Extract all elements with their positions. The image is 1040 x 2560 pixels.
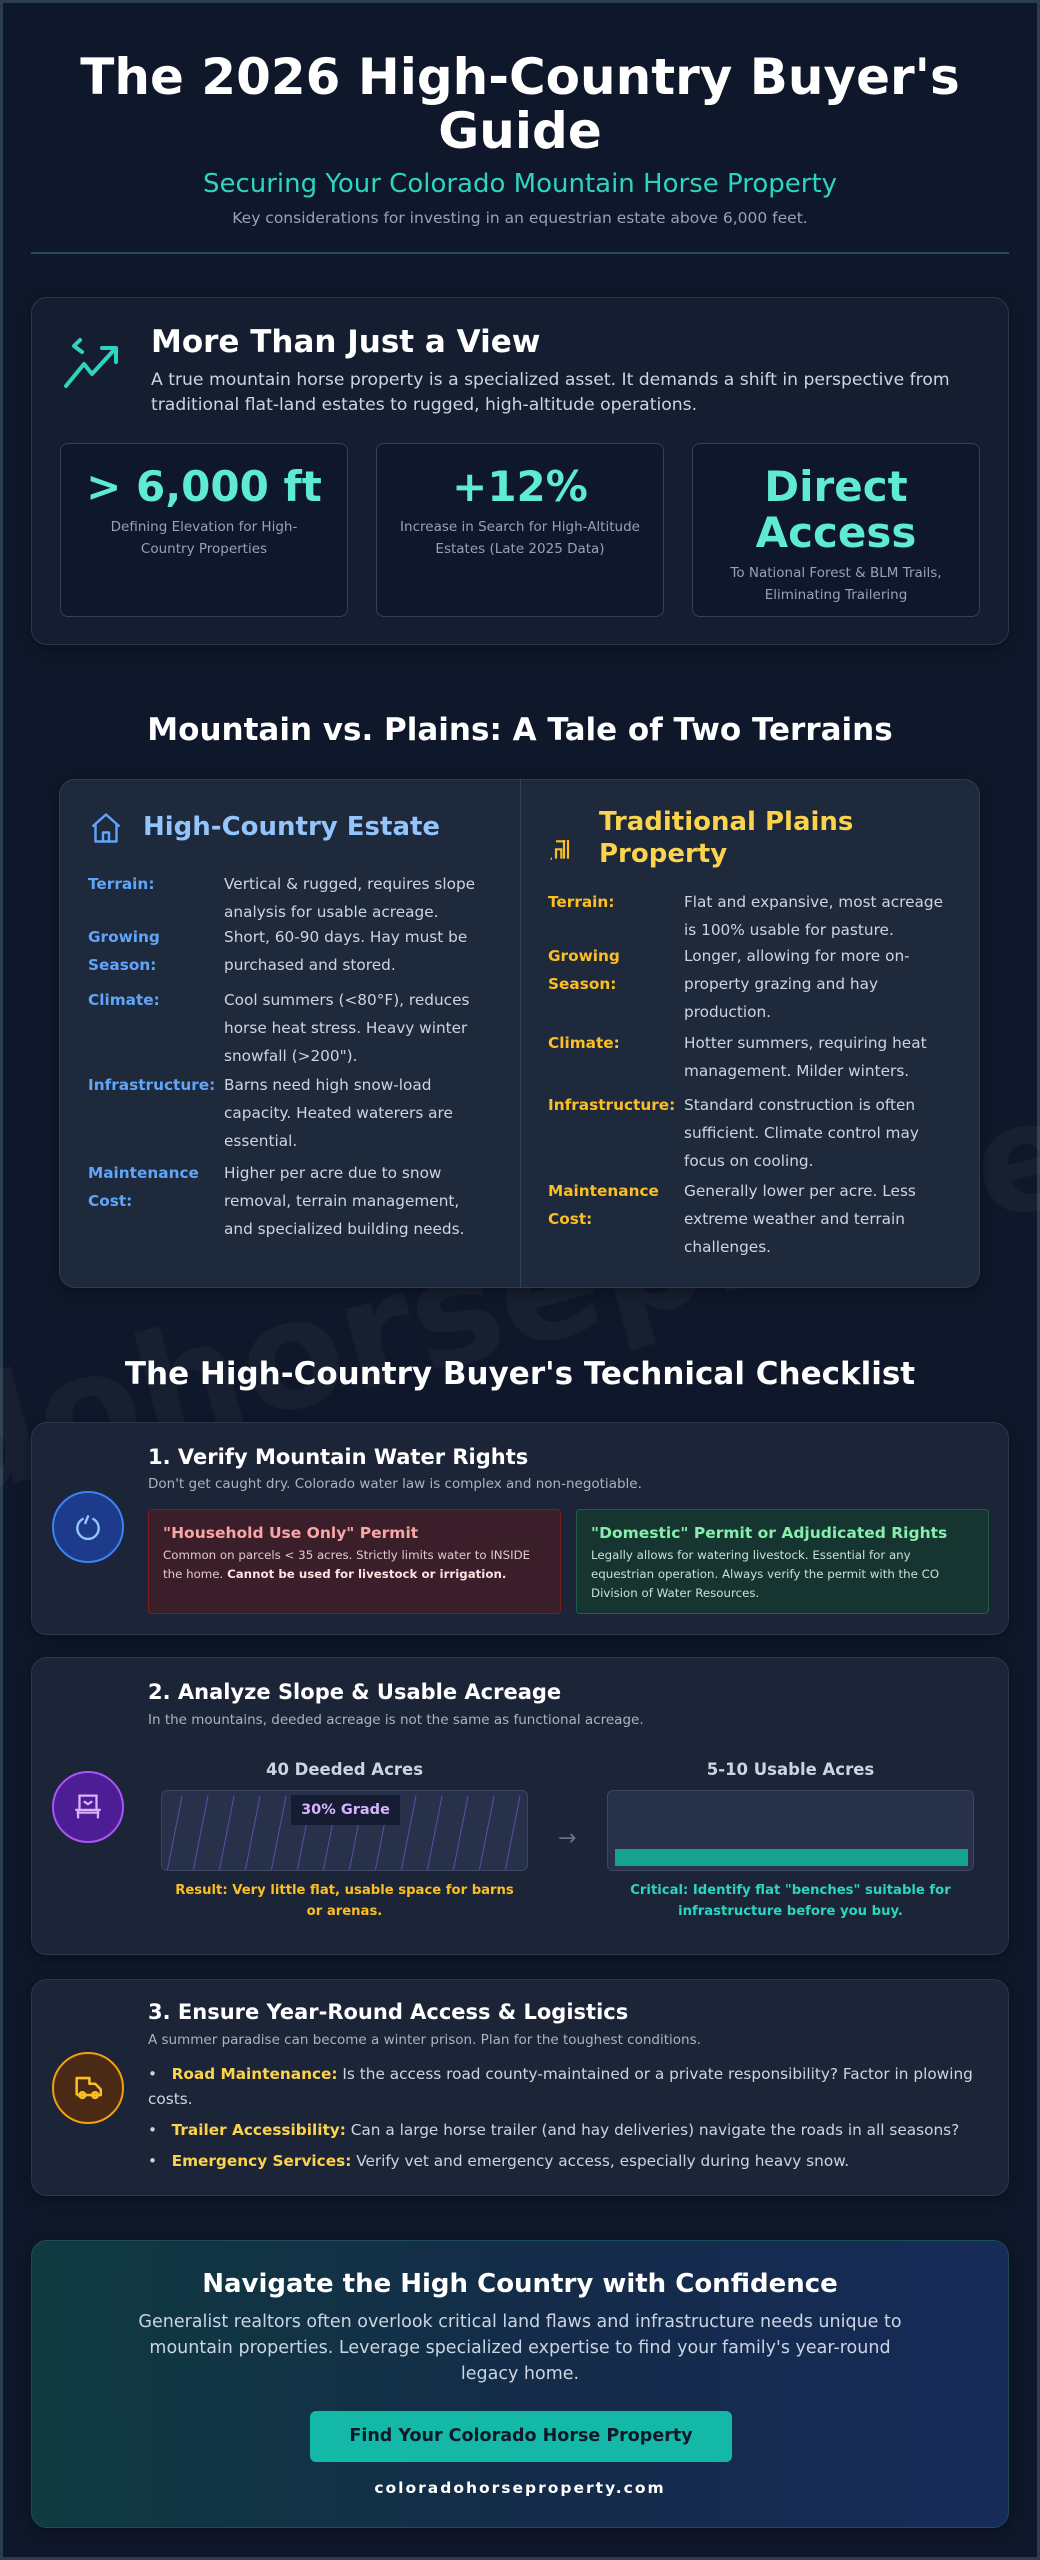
card: access — [31, 1979, 1009, 2196]
card: water rights — [31, 1422, 1009, 1635]
icon: trending arrow — [64, 338, 118, 388]
column: plains — [548, 807, 943, 1256]
arrow: → — [558, 1826, 576, 1851]
button: Find Your Colorado Horse Property — [349, 2426, 693, 2446]
column: high-country: Short, 60-90 days. Hay must be purchased and stored. — [224, 928, 467, 974]
diagram: deeded acres — [161, 1760, 528, 1919]
bullet list: • Emergency Services: Verify vet and emergency access, especially during heavy snow. — [148, 2152, 849, 2170]
box: household permit: "Household Use Only" Permit — [163, 1524, 418, 1542]
card: slope: In the mountains, deeded acreage is not the same as functional acreage. — [148, 1712, 644, 1728]
column: high-country: Cool summers (<80°F), reduces horse heat stress. Heavy winter snowfall (>200"). — [224, 991, 469, 1065]
column: plains: Climate: — [548, 1034, 620, 1052]
stat: elevation: Defining Elevation for High-Country Properties — [111, 519, 297, 557]
stat: search increase: +12% — [452, 462, 588, 511]
title — [80, 48, 960, 160]
column: plains: Growing — [548, 947, 620, 965]
box: domestic permit: Legally allows for watering livestock. Essential for any equestrian operation. Always verify the permit with the CO Division of Water Resources. — [591, 1548, 939, 1600]
column: plains: Traditional Plains — [599, 807, 853, 837]
column: plains: Property — [599, 839, 727, 869]
column: plains: Generally lower per acre. Less extreme weather and terrain challenges. — [684, 1182, 916, 1256]
bullet list — [148, 2065, 973, 2170]
CTA panel — [31, 2240, 1009, 2528]
card: water rights: Don't get caught dry. Colorado water law is complex and non-negotiable. — [148, 1476, 642, 1492]
title: Guide — [438, 102, 602, 160]
box: household permit — [148, 1509, 561, 1614]
subtitle: Securing Your Colorado Mountain Horse Property — [203, 169, 837, 199]
icon: house — [92, 813, 120, 843]
column: plains: Cost: — [548, 1210, 592, 1228]
bullet list: • Road Maintenance: Is the access road county-maintained or a private responsibility? Factor in plowing costs. — [148, 2065, 973, 2108]
heading: More Than Just a View — [151, 324, 540, 360]
card: access: A summer paradise can become a winter prison. Plan for the toughest conditions. — [148, 2032, 701, 2048]
stat: direct access: Access — [756, 508, 916, 557]
column: high-country: Season: — [88, 956, 156, 974]
stat: direct access — [692, 443, 980, 617]
diagram: usable acres — [607, 1760, 974, 1919]
stat: elevation: > 6,000 ft — [86, 462, 322, 511]
column: high-country: High-Country Estate — [143, 812, 440, 842]
icon: truck — [52, 2052, 124, 2124]
CTA panel: Navigate the High Country with Confidence — [202, 2269, 838, 2299]
tagline: Key considerations for investing in an equestrian estate above 6,000 feet. — [232, 209, 808, 227]
column: high-country: Vertical & rugged, requires slope analysis for usable acreage. — [224, 875, 475, 921]
title: The 2026 High-Country Buyer's — [80, 48, 960, 106]
diagram: deeded acres: 40 Deeded Acres — [266, 1760, 423, 1779]
stat: search increase — [376, 443, 664, 617]
column: plains: Infrastructure: — [548, 1096, 675, 1114]
column: plains: Flat and expansive, most acreage is 100% usable for pasture. — [684, 893, 943, 939]
CTA panel: Generalist realtors often overlook critical land flaws and infrastructure needs unique to mountain properties. Leverage specialized expertise to find your family's year-round legacy home. — [138, 2312, 902, 2384]
diagram: deeded acres: 30% Grade — [301, 1802, 390, 1818]
icon: water — [52, 1491, 124, 1563]
column: plains: Longer, allowing for more on-property grazing and hay production. — [684, 947, 910, 1021]
button — [310, 2411, 732, 2462]
icon: slope — [52, 1771, 124, 1843]
column: plains: Maintenance — [548, 1182, 659, 1200]
box: domestic permit: "Domestic" Permit or Adjudicated Rights — [591, 1524, 947, 1542]
card: water rights: 1. Verify Mountain Water Rights — [148, 1445, 528, 1469]
column: high-country: Maintenance — [88, 1164, 199, 1182]
column: high-country: Barns need high snow-load capacity. Heated waterers are essential. — [224, 1076, 453, 1150]
panel: comparison — [59, 779, 980, 1288]
diagram: deeded acres: Result: Very little flat, usable space for barns or arenas. — [175, 1883, 514, 1919]
icon: bars — [550, 840, 570, 860]
heading: mountain vs plains: Mountain vs. Plains: A Tale of Two Terrains — [147, 712, 893, 748]
card: slope — [31, 1657, 1009, 1955]
stat: direct access: Direct — [764, 462, 908, 511]
column: high-country: Growing — [88, 928, 160, 946]
column: high-country: Cost: — [88, 1192, 132, 1210]
stat: elevation — [60, 443, 348, 617]
column: plains: Standard construction is often sufficient. Climate control may focus on cooling. — [684, 1096, 919, 1170]
box: domestic permit — [576, 1509, 989, 1614]
stat: search increase: Increase in Search for High-Altitude Estates (Late 2025 Data) — [400, 519, 640, 557]
intro text: A true mountain horse property is a specialized asset. It demands a shift in perspective from traditional flat-land estates to rugged, high-altitude operations. — [151, 370, 950, 415]
column: high-country: Higher per acre due to snow removal, terrain management, and specialized building needs. — [224, 1164, 464, 1238]
column: plains: Season: — [548, 975, 616, 993]
panel: more than just a view — [31, 297, 1009, 645]
column: high-country: Terrain: — [88, 875, 154, 893]
diagram: usable acres: 5-10 Usable Acres — [707, 1760, 874, 1779]
column: high-country — [88, 812, 475, 1238]
column: plains: Hotter summers, requiring heat management. Milder winters. — [684, 1034, 927, 1080]
url: coloradohorseproperty.com — [374, 2479, 666, 2497]
bullet list: • Trailer Accessibility: Can a large horse trailer (and hay deliveries) navigate the roads in all seasons? — [148, 2121, 959, 2139]
stat: direct access: To National Forest & BLM Trails, Eliminating Trailering — [730, 565, 942, 603]
card: slope: 2. Analyze Slope & Usable Acreage — [148, 1680, 561, 1704]
column: high-country: Climate: — [88, 991, 160, 1009]
diagram: usable acres: Critical: Identify flat "benches" suitable for infrastructure before you buy. — [630, 1883, 951, 1919]
card: access: 3. Ensure Year-Round Access & Logistics — [148, 2000, 628, 2024]
column: high-country: Infrastructure: — [88, 1076, 215, 1094]
column: plains: Terrain: — [548, 893, 614, 911]
box: household permit: Common on parcels < 35 acres. Strictly limits water to INSIDE the home. Cannot be used for livestock or irrigation. — [163, 1548, 530, 1581]
heading: checklist: The High-Country Buyer's Technical Checklist — [125, 1356, 915, 1392]
